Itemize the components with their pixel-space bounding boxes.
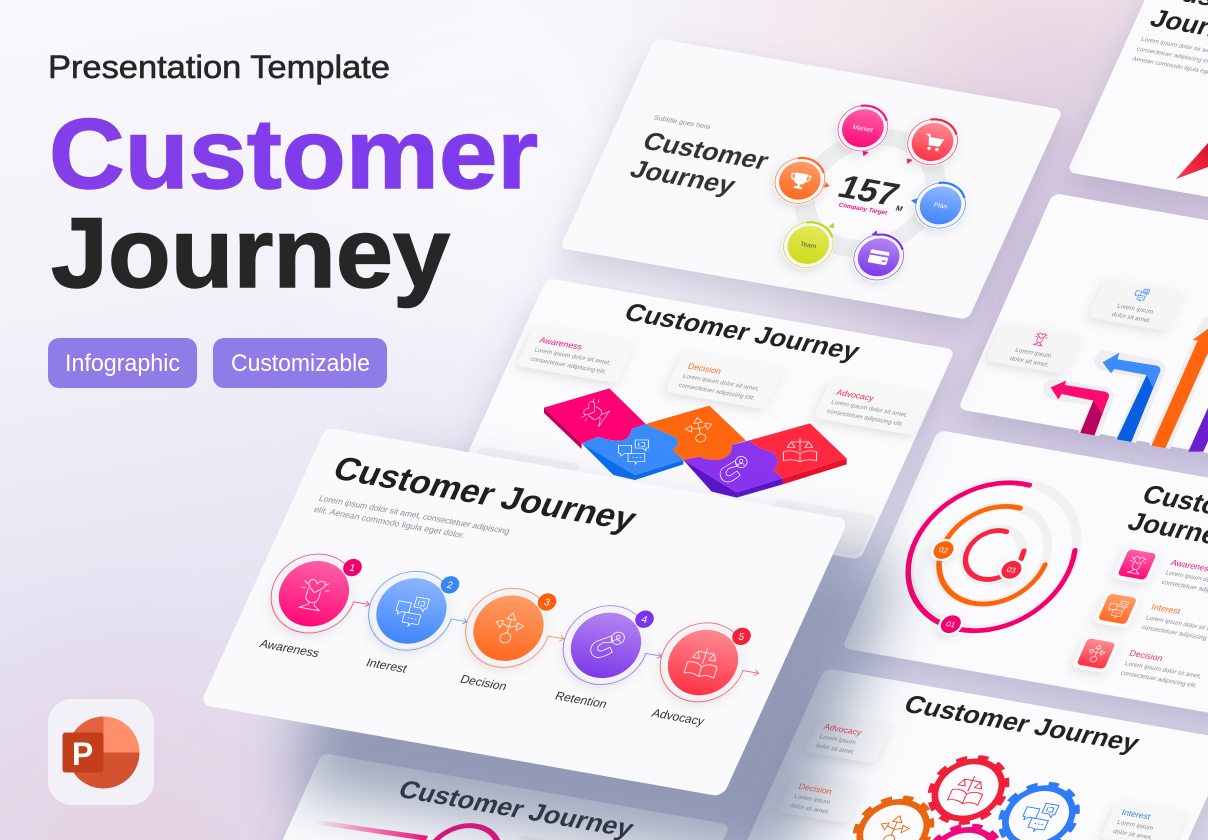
card: interest note: Lorem ipsum [1116,303,1154,315]
card: awareness note [986,322,1082,374]
node: Team: Team [799,241,817,250]
title: Journey [626,155,741,200]
cycle pointers [807,147,934,240]
line: pink fade [312,816,428,840]
card: advocacy [804,713,893,764]
step 2: interest: 2 [445,580,455,592]
node: Market: Market [852,124,874,134]
card: advocacy: Advocacy [835,387,876,403]
step labels: Awareness [257,637,322,660]
card: decision: Decision [797,781,834,796]
step labels: Advocacy [650,706,708,728]
gear: red [919,752,1017,828]
item: decision: Lorem ipsum dolor sit amet, [1124,660,1203,680]
item: decision: Decision [1128,648,1165,663]
title [1124,479,1208,556]
step 3: decision [455,581,577,677]
card: decision: consectetuer adipiscing elit. [677,382,756,402]
item: decision [1071,634,1208,690]
card: advocacy: Lorem ipsum dolor sit amet, [830,399,909,419]
tag: customizable [213,338,387,388]
step 1: awareness [261,547,382,642]
main slide: five step journey [200,427,849,797]
slide: bottom timeline [227,753,730,840]
card: advocacy: Advocacy [822,722,864,737]
chart: isometric puzzle [544,388,847,498]
icon: PowerPoint logo [48,699,154,805]
card: decision: Lorem ipsum [793,793,831,806]
step labels: Interest [364,656,410,676]
item: awareness [1112,545,1208,600]
number: 157 M: 157 [832,169,905,213]
card: advocacy [813,377,932,436]
card: interest: Interest [1120,807,1153,821]
card: interest: Lorem ipsum [1116,819,1154,832]
card: advocacy: Lorem ipsum [818,734,857,746]
gear: blue [990,779,1088,840]
slide: arrows [958,193,1208,481]
badge 03: 03 [1005,565,1018,575]
ghost cards [462,446,877,557]
step 1: awareness: 1 [348,563,357,574]
card: decision [777,773,865,824]
ghost card [501,835,605,840]
card: decision: Decision [686,361,723,376]
title: Customer Journey [900,689,1144,757]
ring: pink [415,820,511,840]
slide: puzzle [452,278,955,560]
gear: orange [844,793,942,840]
node: trophy [768,152,832,209]
node: Market [830,100,895,156]
node: Plan: Plan [933,202,948,211]
ring: middle orange [922,498,1066,612]
icon: red spike [1176,143,1208,179]
heading: journey: Journey [51,197,450,308]
heading: customer: Customer [49,98,538,209]
item: interest: Interest [1150,602,1183,616]
tag: infographic: Infographic [65,350,180,377]
slide body text [1131,36,1208,76]
main slide shadow [290,470,900,840]
tag: customizable: Customizable [231,350,370,377]
step 2: interest [358,564,480,660]
card: awareness: Awareness [538,335,584,351]
subtitle: Subtitle goes here [652,115,711,131]
intro text: Lorem ipsum dolor sit amet, consectetuer adipiscing [317,493,512,536]
puzzle icons [580,396,816,482]
intro text: elit. Aenean commodo ligula eget dolor. [312,504,467,540]
step 5: advocacy: 5 [737,632,746,643]
title [626,127,773,203]
badge 01: 01 [945,620,957,629]
item: decision: consectetuer adipiscing elit. [1119,670,1198,690]
step 3: decision: 3 [542,597,552,609]
slide: concentric progress rings [842,430,1208,720]
heading: presentation template: Presentation Template [48,49,390,85]
card: interest [1100,800,1189,840]
card: decision: dolor sit amet. [789,802,831,816]
node: Team [776,217,841,273]
title: Customer Journey [620,298,865,366]
item: interest [1092,589,1208,644]
step labels: Retention [553,689,609,711]
card: advocacy: dolor sit amet. [814,743,856,756]
gear: pink [913,821,1011,840]
title: Customer Journey [327,450,642,538]
badge 02 [927,537,960,563]
icon: PowerPoint logo: P [72,736,93,772]
node: Plan [908,177,973,234]
card: decision: Lorem ipsum dolor sit amet, [681,373,761,393]
card: interest note [1088,278,1185,331]
cycle connector ring [785,128,955,258]
card: awareness note: Lorem ipsum [1014,347,1052,360]
slide: company target cycle [560,38,1063,320]
step 4: retention: 4 [640,614,649,626]
step labels [257,637,708,728]
card: awareness: consectetuer adipiscing elit. [529,356,608,376]
title: Customer [639,127,773,175]
badge 02: 02 [937,545,949,555]
card: interest note: dolor sit amet. [1111,311,1152,324]
recessed ring tracks [884,469,1102,641]
card: awareness note: dolor sit amet. [1009,355,1050,369]
node: wallet [846,229,911,285]
number: 157 M: M [894,204,904,213]
slide: gears [730,668,1208,840]
label: company target: Company Target [837,202,888,217]
step labels: Decision [458,672,509,693]
badge 03 [995,557,1028,583]
node: cart [900,114,965,170]
card: awareness: Lorem ipsum dolor sit amet, [533,347,612,367]
card: advocacy: consectetuer adipiscing elit. [826,408,905,428]
card: decision [665,351,784,409]
tag: infographic [48,338,197,388]
card: awareness [517,325,635,383]
step 5: advocacy [650,616,771,711]
badge 01 [934,611,967,637]
slide: funnel with red spike, top right [1067,0,1208,244]
ring: inner red [957,527,1031,584]
ring: outer pink [883,470,1101,643]
chart: rising arrows [1051,327,1208,452]
step 4: retention [553,598,674,694]
